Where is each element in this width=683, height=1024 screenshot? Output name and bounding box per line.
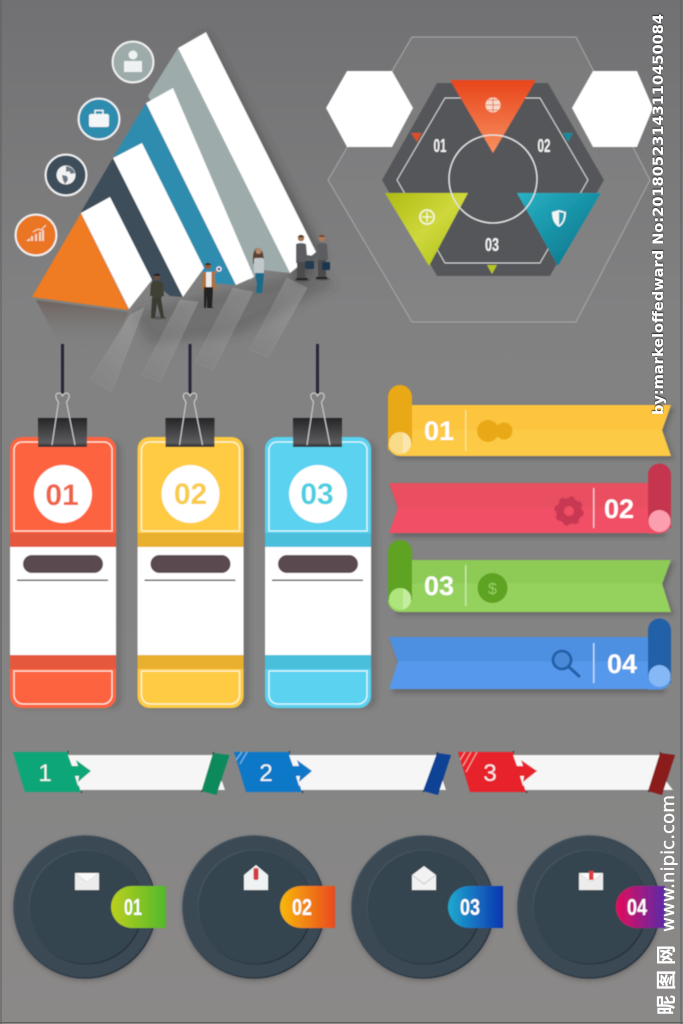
ribbon 02 red [389,464,671,537]
icon: open envelope with letter [244,865,268,890]
hanging wire [61,344,64,394]
ground reflections [36,278,307,392]
arrow banner 1 green [13,752,230,795]
bar 2: slate [81,143,204,297]
label 02: 02 [538,136,550,156]
icon: globe badge [46,154,86,196]
binder clip [166,393,214,447]
ground shadow [130,268,335,345]
icon: chart badge [16,214,56,256]
icon: gear [556,498,582,524]
roll [648,464,671,534]
number badge: 03 [300,478,334,511]
tag 03: 03 [460,894,480,920]
ribbon 04 blue [389,618,671,693]
icon: magnifier [553,651,580,677]
arrow [72,760,91,782]
icon: dollar coin: $ [488,581,497,598]
icon: briefcase badge [78,98,120,140]
dark hexagon [382,83,604,276]
end tab [202,753,230,795]
number badge: 01 [45,479,79,512]
inner line hexagon [397,98,588,263]
dial 01 [13,836,166,981]
hexagon triangle diagram [326,37,653,322]
end tab [423,753,451,795]
person 5 [314,235,330,280]
label 01: 01 [434,136,446,156]
number 01: 01 [424,416,454,446]
icon: envelope with red letter [579,871,603,890]
icon: profile badge [112,42,154,82]
tag 02: 02 [292,894,312,920]
pyramid shadow [180,32,326,286]
tag 02 [280,886,335,928]
marker: lime [487,265,497,274]
arrow banner 2 blue [234,752,451,795]
pyramid bar chart with people [16,32,335,392]
hanging wire [188,344,192,394]
dial 04 [517,836,665,981]
triangle: orange with globe [450,80,536,153]
person 4 [294,235,315,282]
roll [388,385,412,456]
number badge [34,465,92,523]
label 03: 03 [485,235,499,255]
binder clip [293,393,342,447]
marker: orange [411,133,422,142]
icon: envelope [75,873,99,890]
person 1 [150,274,167,320]
arrow [293,760,312,782]
number 3: 3 [483,760,497,787]
triangle: lime with target [385,193,468,266]
watermark: site: www.nipic.com [658,795,679,932]
person 2 [202,263,222,308]
center circle [449,135,537,223]
arrow banner 3 red [458,752,675,795]
bar 4: grey [148,32,316,280]
arrow [517,760,537,782]
tag 03 [448,886,503,928]
number badge [289,465,347,523]
tag 01 [111,886,166,928]
number badge: 02 [174,478,207,511]
binder clip [38,393,87,447]
title pill [150,555,230,573]
icon: coins [477,420,512,442]
watermark: author and number: by:markeloffedward No:20180523143110450084 [651,14,667,415]
triangle: teal with shield [517,193,601,266]
dial 03 [351,836,503,981]
icon: open envelope [412,866,436,890]
marker: teal [563,133,573,142]
number 1: 1 [38,760,52,787]
hanging wire [316,344,319,394]
number 2: 2 [259,760,273,787]
white hexagon right [572,71,653,147]
dial 02 [182,836,335,981]
ribbon 01 yellow [388,385,674,459]
number badge [162,465,220,523]
hanging card 01 [10,344,122,709]
bar 1: orange [32,197,152,310]
icon: dollar coin [478,573,508,603]
outer line hexagon [328,37,650,322]
title pill [23,555,103,573]
hanging card 02 [138,344,250,709]
tag 04 [616,886,665,928]
ribbon 03 green [388,540,674,615]
roll [388,540,412,612]
end tab [648,753,675,795]
watermark: site name: 昵图网 [654,945,678,1015]
number 04: 04 [607,649,637,679]
tag 04: 04 [627,894,647,920]
bar 3: teal [114,88,254,285]
number 02: 02 [604,494,634,524]
person 3 [253,248,264,293]
tag 01: 01 [124,894,142,920]
white hexagon left [326,71,413,147]
number 03: 03 [424,571,454,601]
roll [648,618,671,690]
hanging card 03 [265,344,377,709]
title pill [278,555,358,573]
